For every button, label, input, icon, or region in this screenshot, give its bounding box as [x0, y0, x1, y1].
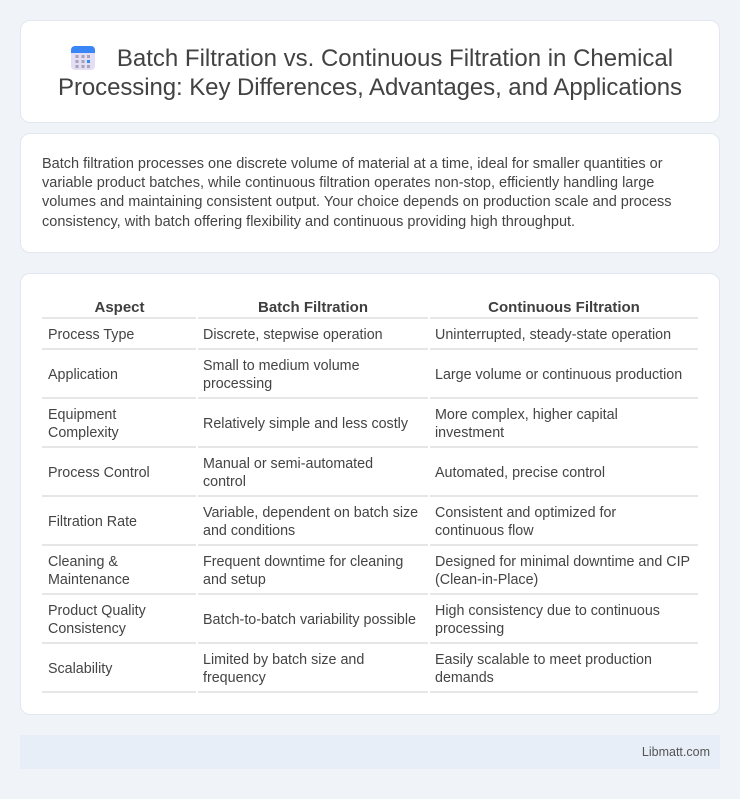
- title: Processing: Key Differences, Advantages, and Applications: [58, 74, 682, 101]
- table: comparison: Variable, dependent on batch size: [203, 505, 418, 521]
- table: comparison: Uninterrupted, steady-state operation: [435, 327, 671, 343]
- footer text: Libmatt.com: [642, 745, 710, 759]
- table: comparison: Easily scalable to meet production: [435, 652, 652, 668]
- row: Product Quality Consistency: Consistency: [48, 621, 126, 637]
- row: Equipment Complexity: [48, 407, 119, 441]
- column header: Aspect: Aspect: [94, 299, 145, 316]
- table: comparison: frequency: [203, 670, 266, 686]
- table: comparison: and conditions: [203, 523, 295, 539]
- row: Process Type: Process Type: [48, 327, 134, 343]
- table: comparison: Large volume or continuous production: [435, 367, 682, 383]
- table: comparison: More complex, higher capital: [435, 407, 618, 423]
- table: comparison: Manual or semi-automated: [203, 456, 373, 472]
- table: comparison: continuous flow: [435, 523, 534, 539]
- text block: introduction: consistency, with batch offering flexibility and continuous providing high throughput.: [42, 214, 575, 230]
- row: Scalability: Scalability: [48, 661, 112, 677]
- table: comparison: and setup: [203, 572, 266, 588]
- table: comparison: High consistency due to continuous: [435, 603, 660, 619]
- row: Filtration Rate: Filtration Rate: [48, 514, 137, 530]
- table: comparison: investment: [435, 425, 504, 441]
- panel: comparison table: [20, 273, 720, 715]
- text block: introduction: Batch filtration processes one discrete volume of material at a time, ideal for smaller quantities or: [42, 156, 663, 172]
- table: comparison: Consistent and optimized for: [435, 505, 616, 521]
- table: comparison: Discrete, stepwise operation: [203, 327, 383, 343]
- table: comparison: processing: [203, 376, 272, 392]
- table: comparison: Batch-to-batch variability possible: [203, 612, 416, 628]
- row: Equipment Complexity: Complexity: [48, 425, 119, 441]
- row: Product Quality Consistency: [48, 603, 146, 637]
- table: comparison: Limited by batch size and: [203, 652, 364, 668]
- panel: introduction: [20, 133, 720, 253]
- table: comparison: Small to medium volume: [203, 358, 360, 374]
- text block: introduction: [42, 156, 672, 230]
- table: comparison: control: [203, 474, 246, 490]
- table: comparison: [42, 299, 698, 693]
- column header: Batch Filtration: Batch Filtration: [258, 299, 368, 316]
- row: Cleaning & Maintenance: [48, 554, 130, 588]
- row: Equipment Complexity: Equipment: [48, 407, 116, 423]
- text block: introduction: variable product batches, while continuous filtration operates non-stop, efficiently handling large: [42, 175, 654, 191]
- table: comparison: Relatively simple and less costly: [203, 416, 408, 432]
- table: comparison: Automated, precise control: [435, 465, 605, 481]
- table: comparison: processing: [435, 621, 504, 637]
- table: comparison: Designed for minimal downtime and CIP: [435, 554, 690, 570]
- text block: introduction: volumes and maintaining consistent output. Your choice depends on production scale and process: [42, 194, 672, 210]
- row: Application: Application: [48, 367, 118, 383]
- table: comparison: Frequent downtime for cleaning: [203, 554, 403, 570]
- row: Cleaning & Maintenance: Cleaning &: [48, 554, 118, 570]
- row: Cleaning & Maintenance: Maintenance: [48, 572, 130, 588]
- row: Process Control: Process Control: [48, 465, 150, 481]
- column header: Continuous Filtration: Continuous Filtration: [488, 299, 640, 316]
- table: comparison: (Clean-in-Place): [435, 572, 538, 588]
- title: [58, 45, 682, 101]
- footer bar: [20, 735, 720, 769]
- table: comparison: demands: [435, 670, 494, 686]
- row: Product Quality Consistency: Product Quality: [48, 603, 146, 619]
- icon: calendar: [71, 46, 95, 70]
- panel: title card: [20, 20, 720, 123]
- title: Batch Filtration vs. Continuous Filtration in Chemical: [117, 45, 673, 72]
